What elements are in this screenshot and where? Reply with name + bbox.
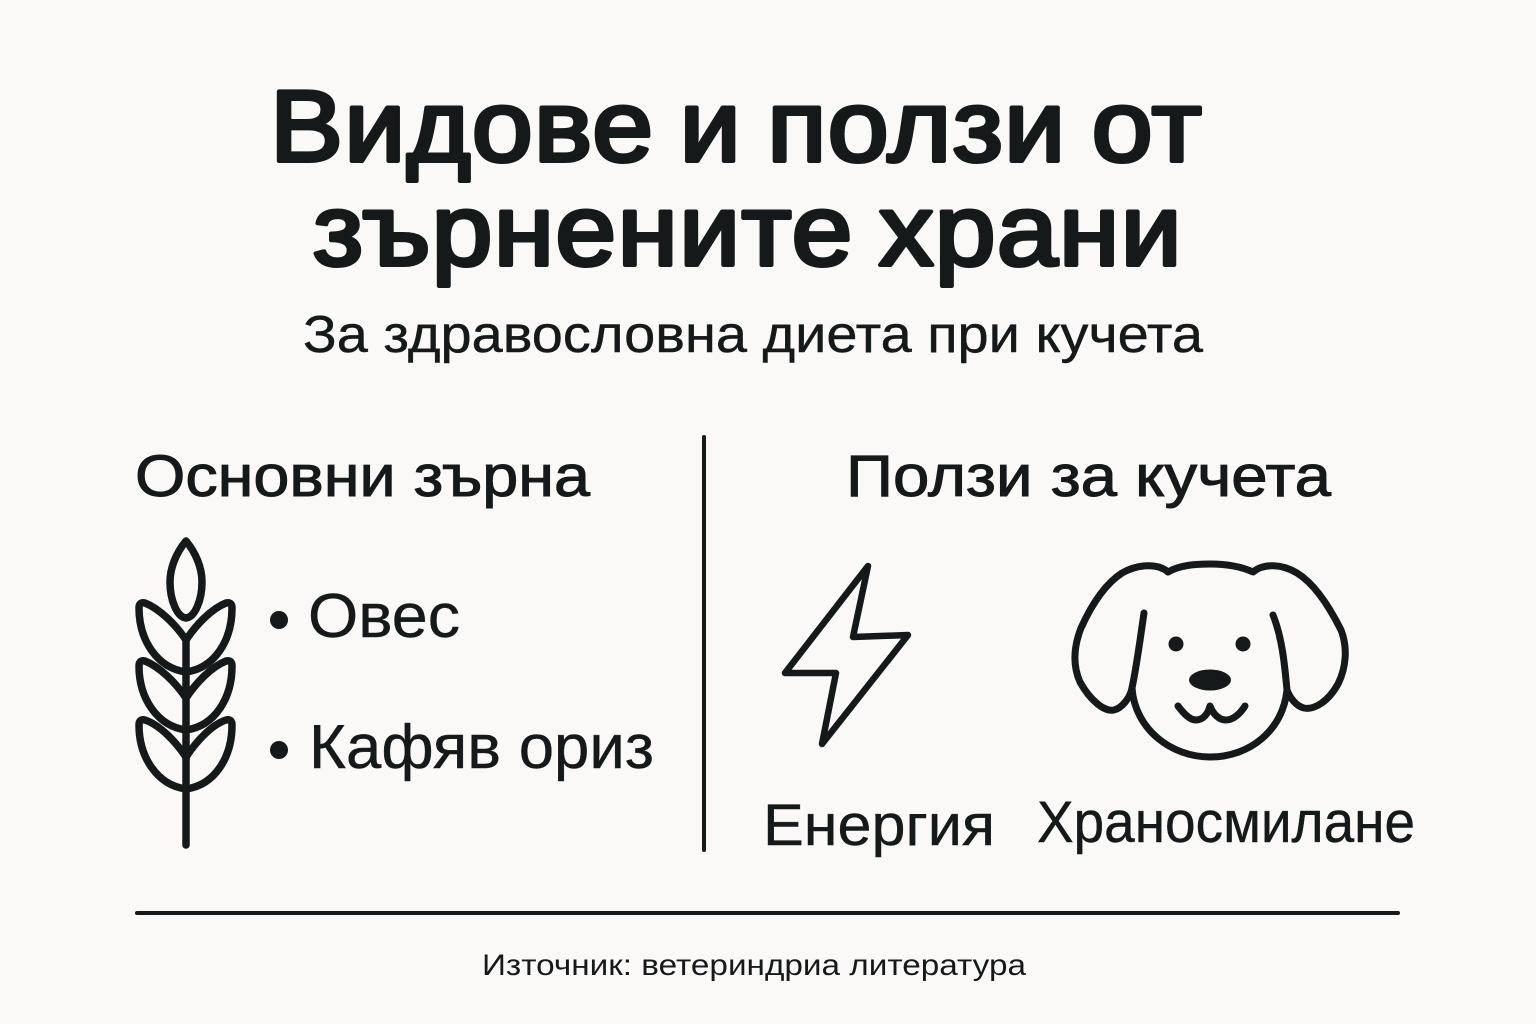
title: Видове и ползи от (270, 71, 1203, 183)
label: energy: Енергия (763, 793, 995, 858)
subtitle: За здравословна диета при кучета (303, 306, 1203, 364)
label: digestion: Храносмилане (1037, 790, 1415, 855)
footer rule (135, 911, 1400, 915)
heading: benefits: Ползи за кучета (846, 444, 1332, 509)
icon: dog face (1075, 564, 1345, 757)
panel: main grains (135, 444, 654, 845)
bullet list: grains (270, 582, 654, 782)
heading: main grains: Основни зърна (135, 444, 591, 509)
list item: brown rice: Кафяв ориз (309, 713, 654, 782)
list item: oats: Овес (308, 582, 460, 651)
title (270, 71, 1203, 287)
icon: wheat (139, 541, 232, 845)
dog eyes and nose (1168, 636, 1250, 690)
icon: lightning bolt (785, 566, 908, 744)
title: зърнените храни (313, 175, 1183, 287)
panel: benefits (763, 444, 1415, 858)
source note: Източник: ветериндриа литература (482, 949, 1026, 982)
panel divider (702, 435, 706, 852)
